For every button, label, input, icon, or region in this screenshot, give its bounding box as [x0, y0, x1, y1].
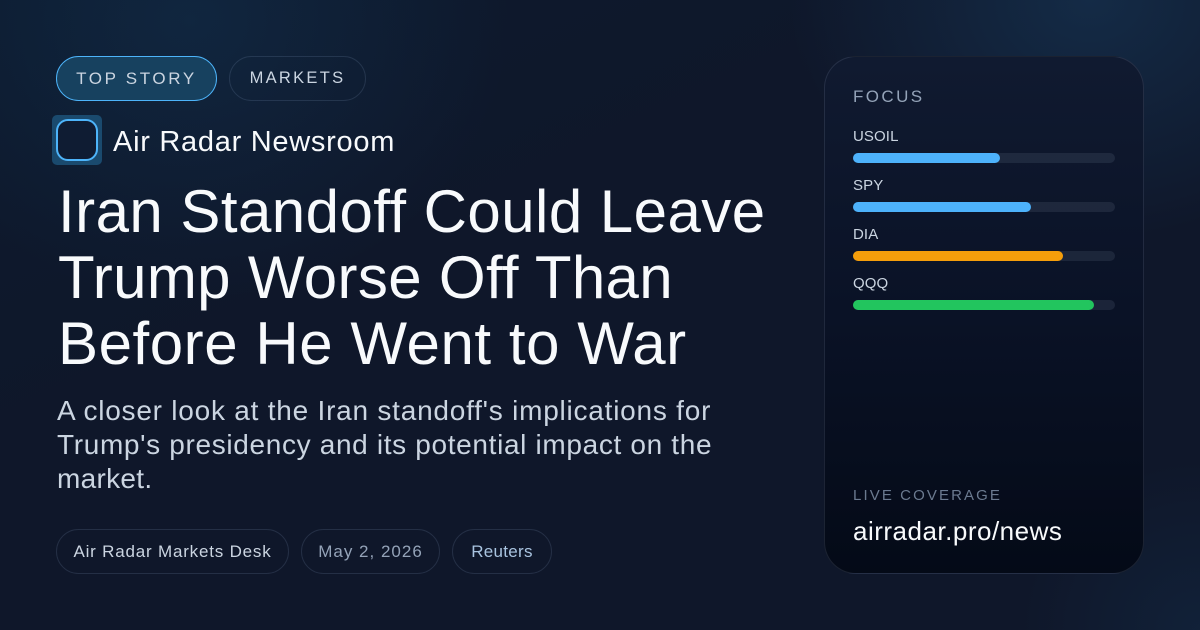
meta: source: [452, 529, 552, 574]
bar label: QQQ: QQQ: [853, 275, 888, 292]
subtitle: [57, 395, 712, 494]
brand name: Air Radar Newsroom: [113, 126, 395, 158]
title: Before He Went to War: [58, 310, 687, 377]
tag: top story: [56, 56, 217, 101]
panel: focus: [824, 56, 1144, 574]
subtitle: Trump's presidency and its potential impact on the: [57, 429, 712, 460]
bar: USOIL: [853, 153, 1115, 163]
tag: top story: TOP STORY: [76, 68, 197, 88]
bar label: DIA: DIA: [853, 226, 878, 243]
meta: date: [301, 529, 440, 574]
title: Iran Standoff Could Leave: [58, 178, 766, 245]
title: [58, 178, 766, 377]
meta: date: May 2, 2026: [318, 542, 423, 560]
bar: QQQ: [853, 300, 1115, 310]
meta: source: Reuters: [471, 542, 533, 560]
title: Trump Worse Off Than: [58, 244, 673, 311]
subtitle: A closer look at the Iran standoff's implications for: [57, 395, 711, 426]
tag: markets: [229, 56, 366, 101]
bar: SPY: [853, 202, 1115, 212]
meta: desk: [56, 529, 289, 574]
tag: markets: MARKETS: [250, 69, 345, 87]
focus heading: FOCUS: [853, 87, 924, 106]
bar: DIA: [853, 251, 1115, 261]
subtitle: market.: [57, 463, 152, 494]
bar label: SPY: SPY: [853, 177, 883, 194]
brand icon: [52, 115, 102, 165]
live coverage label: LIVE COVERAGE: [853, 487, 1002, 504]
meta: desk: Air Radar Markets Desk: [73, 542, 272, 560]
site url: airradar.pro/news: [853, 516, 1062, 546]
bar label: USOIL: USOIL: [853, 128, 899, 145]
